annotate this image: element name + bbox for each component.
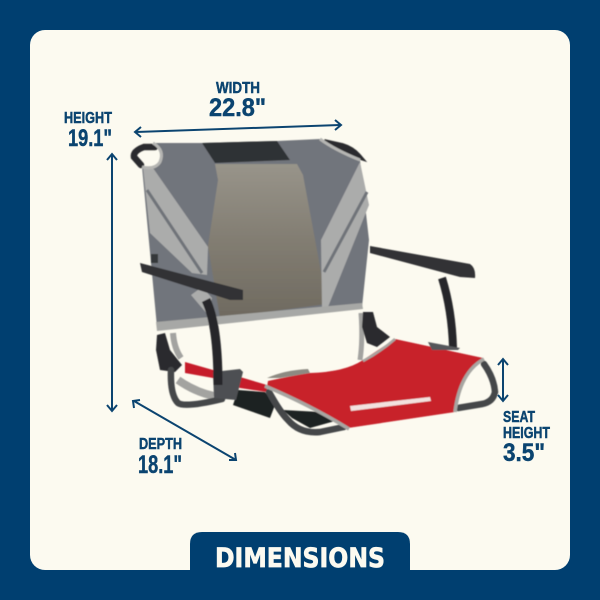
label: depth: DEPTH <box>139 436 182 453</box>
right light stripes <box>321 162 369 307</box>
title tab <box>190 532 410 574</box>
label: height <box>64 110 112 152</box>
label: height: 19.1" <box>68 125 112 152</box>
title tab: DIMENSIONS <box>215 543 385 574</box>
label: seat height: 3.5" <box>503 439 545 467</box>
label: width: WIDTH <box>216 80 260 97</box>
chair <box>134 139 495 432</box>
centre bracket <box>213 369 243 400</box>
right arm post <box>442 278 453 348</box>
label: seat height: HEIGHT <box>503 425 550 442</box>
right clip <box>428 342 460 350</box>
rear straps <box>173 313 362 396</box>
label: width <box>209 80 266 122</box>
left arm rest <box>140 263 243 300</box>
arrow: depth <box>133 400 236 460</box>
back fabric <box>142 139 369 331</box>
arrow: width <box>135 120 341 137</box>
arrow: seat height <box>498 359 508 401</box>
under-seat black parts <box>233 390 335 428</box>
left rail fabric <box>185 362 267 392</box>
side panels <box>142 139 369 327</box>
top mesh <box>202 141 290 163</box>
left arm post <box>206 300 218 385</box>
seat: red fabric <box>267 339 483 428</box>
seat binding <box>265 339 484 429</box>
label: depth: 18.1" <box>138 451 182 479</box>
rear hinges <box>156 312 390 372</box>
label: depth <box>138 436 182 479</box>
label: height: HEIGHT <box>64 110 112 127</box>
label: seat height <box>503 409 550 467</box>
right arm rest <box>370 246 475 278</box>
seat label <box>350 397 431 411</box>
side pocket <box>151 254 158 263</box>
centre taupe panel <box>208 164 327 318</box>
left light stripes <box>143 167 208 275</box>
hem <box>156 303 363 331</box>
seat frame <box>171 364 495 432</box>
arrow: height <box>107 154 117 411</box>
under-seat grey piece <box>267 369 310 378</box>
handle binding <box>142 143 161 168</box>
label: seat height: SEAT <box>503 409 535 426</box>
back frame handles <box>134 142 358 165</box>
label: width: 22.8" <box>209 94 266 122</box>
